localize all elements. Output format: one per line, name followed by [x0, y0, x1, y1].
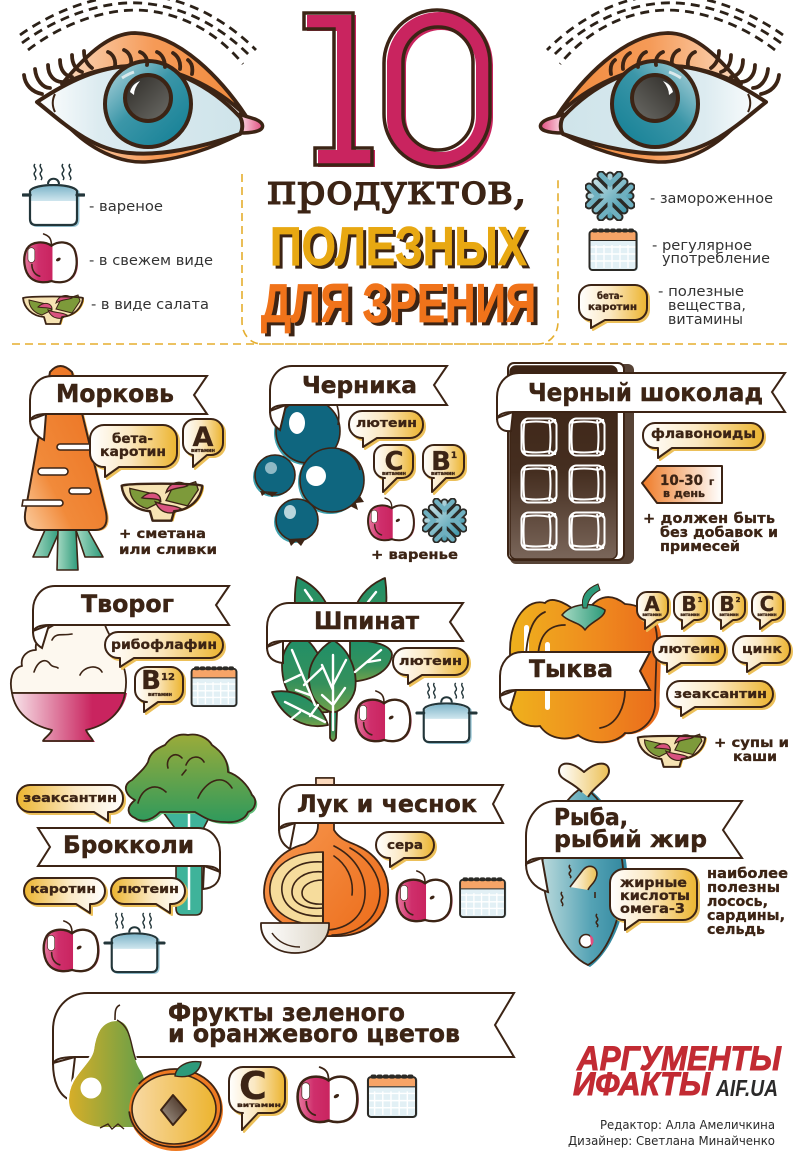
note: without additives: [643, 511, 778, 555]
ribbon: spinach: [267, 603, 463, 663]
panel: spinach: [267, 577, 476, 743]
ribbon: pumpkin: [500, 652, 650, 710]
legend text: nutrients: витамины: [668, 312, 743, 328]
legend text: regular: употребление: [662, 251, 770, 267]
bubble: lutein: [349, 411, 423, 447]
bubble: zeaxanthin: зеаксантин: [674, 686, 767, 701]
bubble: vitamin A: А: [193, 422, 214, 453]
bubble: vitamin C: витамин: [237, 1101, 281, 1109]
legend right: [579, 175, 773, 328]
ribbon: carrot: Морковь: [56, 379, 174, 408]
bubble: vitamin B2: [713, 592, 745, 629]
icon: apple: [397, 871, 453, 922]
note: fish list: полезны: [707, 880, 780, 896]
bubble: vitamin A: витамин: [642, 612, 662, 617]
bubble: beta-carotene: каротин: [100, 444, 166, 460]
note: fish list: сельдь: [707, 922, 765, 938]
icon: salad: [23, 295, 84, 324]
bubble: zeaxanthin: [667, 681, 773, 716]
note: without additives: примесей: [660, 539, 740, 555]
note: fish list: лосось,: [707, 894, 768, 910]
bubble: vitamin C: С: [760, 592, 774, 616]
bubble: lutein: лютеин: [117, 881, 179, 896]
bubble: beta-carotene: бета-: [112, 431, 153, 447]
legend text: nutrients: вещества,: [668, 298, 746, 314]
bubble: vitamin C: С: [384, 447, 404, 477]
ribbon: cottage cheese: Творог: [81, 590, 174, 618]
note: jam: + варенье: [371, 547, 458, 563]
icon: apple: [356, 691, 412, 742]
ribbon: cottage cheese: [33, 586, 229, 648]
icon: apple: [368, 498, 415, 541]
logo: АРГУМЕНТЫ: [576, 1040, 782, 1078]
bubble: vitamin C: С: [239, 1064, 267, 1108]
panel: cottage cheese: [11, 586, 237, 742]
ribbon: fruits: и оранжевого цветов: [168, 1019, 460, 1048]
panel: onion: [261, 778, 506, 953]
bubble: zeaxanthin: [17, 785, 123, 821]
bubble: omega-3: кислоты: [620, 889, 690, 904]
bubble: omega-3: жирные: [620, 876, 687, 891]
bubble: flavonoids: [643, 423, 763, 458]
ribbon: blueberry: [270, 366, 447, 430]
title: для зрения: ДЛЯ ЗРЕНИЯ: [261, 272, 536, 334]
bubble: omega-3: [610, 869, 697, 930]
icon: salad: [638, 734, 707, 767]
bubble: omega-3: омега-3: [620, 902, 685, 917]
ribbon: fruits: [53, 993, 514, 1100]
legend text: nutrients: [658, 284, 746, 328]
bubble: lutein: [653, 636, 725, 672]
note: sour cream: + сметана: [119, 526, 206, 542]
note: sour cream: [119, 526, 217, 558]
bubble: sulfur: [376, 832, 434, 867]
bubble: vitamin B1: витамин: [431, 471, 456, 477]
title: полезных: ПОЛЕЗНЫХ: [273, 218, 530, 280]
bubble: zinc: [733, 636, 790, 672]
panel: fish: [526, 764, 788, 967]
legend text: nutrients: - полезные: [658, 284, 744, 300]
bubble: vitamin B12: [135, 666, 183, 712]
leaves: [272, 577, 392, 741]
ribbon: broccoli: Брокколи: [63, 831, 194, 859]
note: without additives: + должен быть: [643, 511, 775, 527]
bubble: vitamin B1: [674, 592, 707, 629]
legend text: regular: [652, 238, 770, 267]
bubble: riboflavin: [105, 632, 223, 667]
berries: [253, 396, 364, 546]
bubble: riboflavin: рибофлафин: [111, 638, 217, 653]
note: without additives: без добавок и: [660, 525, 778, 541]
icon: apple: [298, 1067, 359, 1123]
pear: [68, 1005, 148, 1129]
legend text: regular: - регулярное: [652, 238, 752, 254]
bubble: beta-carotene: каротин: [588, 302, 637, 313]
chocolate bar: [508, 363, 634, 564]
bubble: vitamin B2: 2: [736, 596, 741, 604]
icon: calendar: [192, 668, 237, 707]
bubble: vitamin B2: витамин: [719, 612, 739, 617]
ribbon: pumpkin: Тыква: [529, 655, 613, 683]
ribbon: fruits: Фрукты зеленого: [168, 998, 405, 1027]
bubble: lutein: [111, 878, 185, 913]
bubble: vitamin A: [183, 419, 223, 467]
bubble: vitamin A: [637, 592, 668, 629]
eye left: [20, 0, 263, 162]
title: для зрения: ДЛЯ ЗРЕНИЯ: [265, 275, 540, 337]
bubble: vitamin B12: витамин: [148, 692, 173, 698]
bowl of curd: [11, 625, 127, 742]
note: soups and porridge: + супы и: [714, 735, 789, 751]
tag: daily dose: г: [709, 477, 714, 488]
icon: salad: [122, 482, 204, 521]
legend text: frozen: - замороженное: [650, 191, 773, 207]
bubble: lutein: [393, 648, 468, 684]
carrot tops: [33, 530, 103, 570]
bubble: vitamin C: витамин: [382, 471, 407, 477]
bubble: lutein: лютеин: [356, 415, 417, 430]
ribbon: spinach: Шпинат: [314, 607, 419, 635]
bubble: vitamin C: [752, 592, 783, 629]
tag: daily dose: в день: [663, 488, 705, 500]
ribbon: fish: Рыба,: [554, 803, 628, 831]
ribbon: broccoli: [38, 828, 220, 889]
icon: snowflake: [426, 502, 463, 539]
logo: AIF.UA: [715, 1075, 778, 1101]
ribbon: onion: [279, 785, 503, 849]
legend text: boiled: - вареное: [89, 199, 163, 215]
note: fish list: сардины,: [707, 908, 785, 924]
icon: calendar: [590, 230, 638, 270]
bubble: vitamin B1: В: [431, 447, 451, 477]
icon: apple: [44, 921, 100, 972]
ribbon: fish: рыбий жир: [554, 825, 707, 853]
pumpkin: [510, 584, 662, 743]
icon: pot: [417, 683, 476, 743]
onion: [264, 778, 388, 936]
logo: ИФАКТЫ: [573, 1066, 711, 1102]
bubble: carotene: [24, 878, 105, 913]
carrot body: [22, 366, 109, 531]
tag: daily dose: 10-30: [660, 473, 703, 489]
credits: Дизайнер: Светлана Минайченко: [568, 1134, 775, 1148]
tag: daily dose: [642, 466, 722, 503]
bubble: lutein: лютеин: [658, 641, 720, 656]
bubble: zinc: цинк: [742, 641, 783, 656]
credits: Редактор: Алла Амеличкина: [600, 1118, 775, 1132]
broccoli plant: [126, 735, 257, 915]
bubble: beta-carotene: бета-: [597, 291, 623, 302]
dish: [261, 923, 329, 953]
bubble: vitamin C: [229, 1064, 285, 1130]
ribbon: chocolate: [497, 373, 785, 431]
note: soups and porridge: [714, 735, 789, 765]
panel: blueberry: [253, 366, 464, 563]
ribbon: onion: Лук и чеснок: [297, 790, 477, 818]
bubble: beta-carotene: [90, 425, 177, 477]
icon: apple: [24, 234, 78, 283]
bubble: lutein: лютеин: [399, 653, 462, 668]
panel: broccoli: [17, 735, 257, 973]
legend left: [23, 164, 213, 324]
bubble: vitamin A: витамин: [191, 448, 216, 454]
ribbon: blueberry: Черника: [302, 373, 417, 399]
panel: pumpkin: [500, 584, 790, 767]
ribbon: fish: [526, 801, 742, 892]
bubble: vitamin B2: В: [719, 592, 735, 616]
title: продуктов: продуктов,: [267, 165, 527, 214]
note: fish list: [707, 866, 788, 938]
bubble: vitamin B1: 1: [451, 451, 457, 461]
bubble: beta-carotene: [579, 285, 647, 328]
legend text: fresh: - в свежем виде: [89, 253, 213, 269]
credits: [568, 1118, 775, 1148]
fish body: [542, 764, 627, 967]
note: fish list: наиболее: [707, 866, 788, 882]
bubble: vitamin C: витамин: [757, 612, 777, 617]
bubble: sulfur: сера: [387, 837, 423, 852]
bubble: vitamin B1: витамин: [680, 612, 700, 617]
logo: [573, 1040, 782, 1102]
icon: calendar: [368, 1077, 417, 1117]
note: sour cream: или сливки: [119, 542, 217, 558]
ribbon: chocolate: Черный шоколад: [528, 378, 763, 407]
icon: calendar: [460, 879, 506, 918]
eye right: [540, 0, 783, 162]
bubble: vitamin B12: 12: [161, 672, 175, 683]
panel: chocolate: [497, 363, 785, 564]
bubble: vitamin C: [374, 445, 413, 492]
bubble: vitamin B1: [423, 445, 464, 492]
bubble: vitamin B1: 1: [698, 596, 703, 604]
note: soups and porridge: каши: [733, 749, 777, 765]
bubble: flavonoids: флавоноиды: [651, 427, 756, 442]
bubble: zeaxanthin: зеаксантин: [23, 790, 117, 805]
bubble: vitamin B12: В: [141, 666, 161, 696]
ribbon: carrot: [30, 376, 207, 440]
panel: fruits: [53, 993, 514, 1151]
bubble: vitamin B1: В: [681, 592, 697, 616]
bubble: carotene: каротин: [30, 881, 96, 896]
bubble: vitamin A: А: [644, 592, 660, 616]
icon: pot: [23, 164, 84, 226]
peach: [129, 1062, 223, 1151]
title: полезных: ПОЛЕЗНЫХ: [270, 215, 527, 277]
icon: snowflake: [589, 175, 631, 217]
panel: carrot: [22, 366, 223, 570]
big number 10: [304, 10, 493, 169]
icon: pot: [105, 913, 164, 973]
legend text: salad: - в виде салата: [91, 297, 209, 313]
